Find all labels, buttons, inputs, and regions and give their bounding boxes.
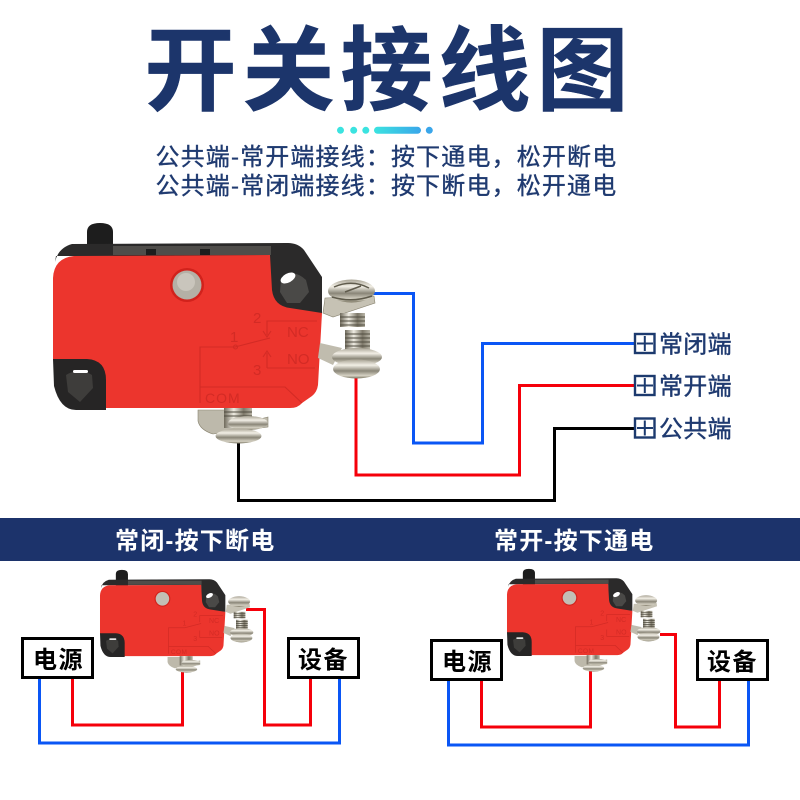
main switch photo: COM — [205, 390, 241, 406]
main switch photo: 3 — [253, 362, 261, 379]
subtitle lines: 公共端-常开端接线：按下通电，松开断电 — [156, 144, 617, 171]
small switch: 1 — [182, 620, 186, 627]
power source box: 电源 — [442, 649, 493, 676]
right diagram: normally open circuit — [432, 569, 768, 745]
device box — [288, 638, 358, 678]
main switch photo: 1 — [230, 329, 238, 346]
device box — [698, 640, 768, 680]
left diagram: normally closed circuit — [22, 570, 358, 743]
section header band: 常闭-按下断电 — [115, 528, 275, 555]
small switch — [100, 570, 253, 673]
small switch: 2 — [193, 612, 197, 619]
red wire switch to device — [660, 634, 720, 727]
subtitle lines: 公共端-常闭端接线：按下断电，松开通电 — [156, 173, 617, 200]
blue return wire — [448, 680, 748, 745]
small switch — [507, 569, 660, 672]
wiring: blue normally closed wire — [372, 294, 635, 443]
small switch: NC — [209, 618, 219, 625]
red wire switch to device — [246, 610, 310, 725]
main switch photo: NO — [287, 351, 310, 368]
red wire source to common — [482, 670, 590, 727]
small switch: 2 — [600, 611, 604, 618]
section header band — [0, 518, 800, 561]
small switch: 3 — [193, 636, 197, 643]
blue return wire — [40, 678, 340, 743]
small switch: NO — [616, 630, 627, 637]
terminal label: normally open: 常开端 — [659, 374, 732, 400]
small switch: COM — [578, 648, 594, 655]
power source box — [22, 638, 92, 678]
power source box: 电源 — [33, 647, 84, 674]
title: 开关接线图 — [144, 21, 635, 123]
main switch photo: 2 — [253, 310, 261, 327]
device box: 设备 — [707, 649, 758, 676]
wiring: black common wire — [238, 428, 635, 500]
device box: 设备 — [298, 647, 349, 674]
small switch: NC — [616, 617, 626, 624]
terminal label: common: 公共端 — [659, 416, 732, 443]
main switch photo — [53, 223, 382, 444]
small switch: 3 — [600, 635, 604, 642]
section header band: 常开-按下通电 — [494, 528, 654, 555]
terminal label: normally closed: 常闭端 — [659, 332, 732, 358]
small switch: NO — [209, 631, 220, 638]
red wire source to common — [72, 670, 182, 725]
power source box — [432, 640, 502, 680]
wiring: red normally open wire — [356, 376, 635, 475]
small switch: 1 — [589, 619, 593, 626]
small switch: COM — [171, 649, 187, 656]
main switch photo: NC — [287, 324, 309, 341]
subtitle lines — [156, 144, 617, 200]
decorative dots and bar — [337, 127, 433, 134]
